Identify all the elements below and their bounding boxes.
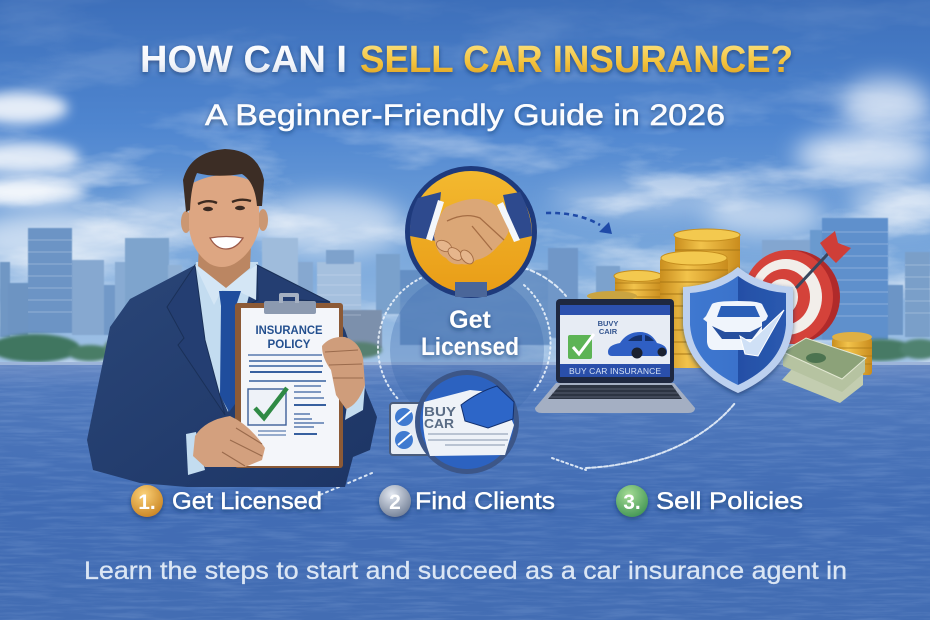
clipboard text lines [248, 355, 326, 435]
shield: windshield [717, 306, 760, 317]
clipboard check mark [255, 388, 287, 418]
handshake: left cuff [410, 192, 441, 241]
man: right cuff [345, 385, 365, 420]
ring label: Get Licensed: Get [449, 306, 492, 334]
coins: back stack [674, 229, 740, 294]
man: left cuff [186, 432, 205, 475]
laptop: blue car [608, 332, 667, 358]
handshake: hands [434, 199, 509, 264]
handshake: right cuff [503, 192, 532, 240]
man: tie [219, 291, 241, 412]
title [140, 39, 793, 81]
shield: car [703, 301, 768, 350]
title: HOW CAN I [140, 39, 347, 81]
dotted flow ring [315, 268, 735, 497]
shield: check [740, 310, 784, 356]
man: neck skin [198, 245, 251, 288]
clipboard heading line 2: POLICY [268, 339, 311, 351]
step 2 [379, 485, 555, 517]
man: hair [183, 149, 264, 212]
step 3 badge [616, 485, 648, 517]
laptop: screen [560, 305, 670, 377]
background: wispy cloud texture [0, 0, 930, 365]
handshake: clip [455, 282, 487, 297]
horizon edge [0, 362, 930, 365]
laptop: lid [556, 299, 674, 383]
stacks of coins [587, 229, 740, 368]
laptop: screen heading: BUVY [598, 319, 618, 328]
man: left hand [193, 416, 265, 467]
shield with car [683, 267, 793, 393]
laptop [535, 299, 695, 413]
man: lapels [167, 265, 330, 415]
coins: small stack [614, 270, 662, 305]
clipboard heading: INSURANCE [256, 325, 323, 337]
step 3 number: 3. [623, 491, 641, 514]
background: clouds [0, 79, 930, 270]
coins: flat coin behind laptop [587, 291, 637, 301]
laptop: screen banner [560, 364, 670, 377]
dart shaft [796, 243, 838, 288]
clipboard checkbox [248, 389, 286, 425]
dashed arrow [546, 213, 612, 234]
clipboard clip [264, 293, 316, 314]
step 1 badge [131, 485, 163, 517]
step 1 number: 1. [138, 491, 156, 514]
man: smile [210, 236, 243, 249]
badge: paper [423, 390, 514, 456]
man: eyebrows and eyes [198, 200, 251, 211]
laptop: green check box [568, 334, 594, 359]
handshake: creases [447, 216, 504, 250]
background: sky [0, 0, 930, 365]
man with clipboard [87, 149, 377, 487]
dart fins [820, 231, 851, 263]
man: right hand [322, 337, 365, 409]
small document card [390, 403, 430, 455]
laptop: base [535, 383, 695, 413]
man: neck and shirt [190, 262, 262, 420]
man: suit jacket [87, 265, 377, 487]
title: SELL CAR INSURANCE? [360, 39, 793, 81]
target with dart [743, 231, 851, 344]
man: ears [181, 209, 268, 233]
laptop: keys [549, 389, 681, 397]
background: ground [0, 362, 930, 620]
ring label: Get Licensed [421, 306, 519, 361]
step 2 label: Find Clients [415, 488, 555, 515]
badge: blue car [461, 386, 514, 428]
clipboard [235, 293, 343, 468]
step 1 [131, 485, 322, 517]
handshake badge [405, 166, 537, 298]
man: face [189, 175, 259, 267]
badge: lines [428, 434, 508, 445]
coins: tall stack [660, 251, 728, 368]
step 3 [616, 485, 803, 517]
cash and coins pile [782, 332, 872, 403]
step 2 badge [379, 485, 411, 517]
pile: cash stacks [782, 360, 863, 403]
step 3 label: Sell Policies [656, 488, 803, 515]
pile: coins [832, 332, 872, 375]
handshake: white shirt cuffs [426, 200, 520, 242]
buy car badge [415, 370, 519, 474]
badge: CAR: CAR [424, 416, 455, 431]
ground texture [0, 362, 930, 620]
man: left hand fingers [222, 428, 262, 466]
laptop: screen heading line 2: CAIR [599, 327, 618, 336]
man: collar [195, 265, 257, 305]
badge: BUY: BUY [424, 404, 456, 419]
handshake: fingers [435, 238, 476, 266]
laptop: banner text: BUY CAR INSURANCE [569, 366, 661, 376]
city skyline [0, 218, 930, 348]
pile: top banknote [783, 338, 866, 379]
trees on horizon [0, 334, 930, 362]
flow ring lens [390, 273, 544, 427]
subtitle: A Beginner-Friendly Guide in 2026 [205, 99, 725, 132]
shield: grille [712, 326, 762, 339]
step 1 label: Get Licensed [172, 488, 322, 515]
pile: seal [806, 353, 826, 363]
ring label: Get Licensed: Licensed [421, 333, 519, 361]
bottom tagline: Learn the steps to start and succeed as a car insurance agent in [84, 557, 847, 585]
step 2 number: 2 [389, 491, 401, 514]
laptop: keyboard [548, 385, 682, 399]
man: right hand fingers [325, 350, 363, 378]
